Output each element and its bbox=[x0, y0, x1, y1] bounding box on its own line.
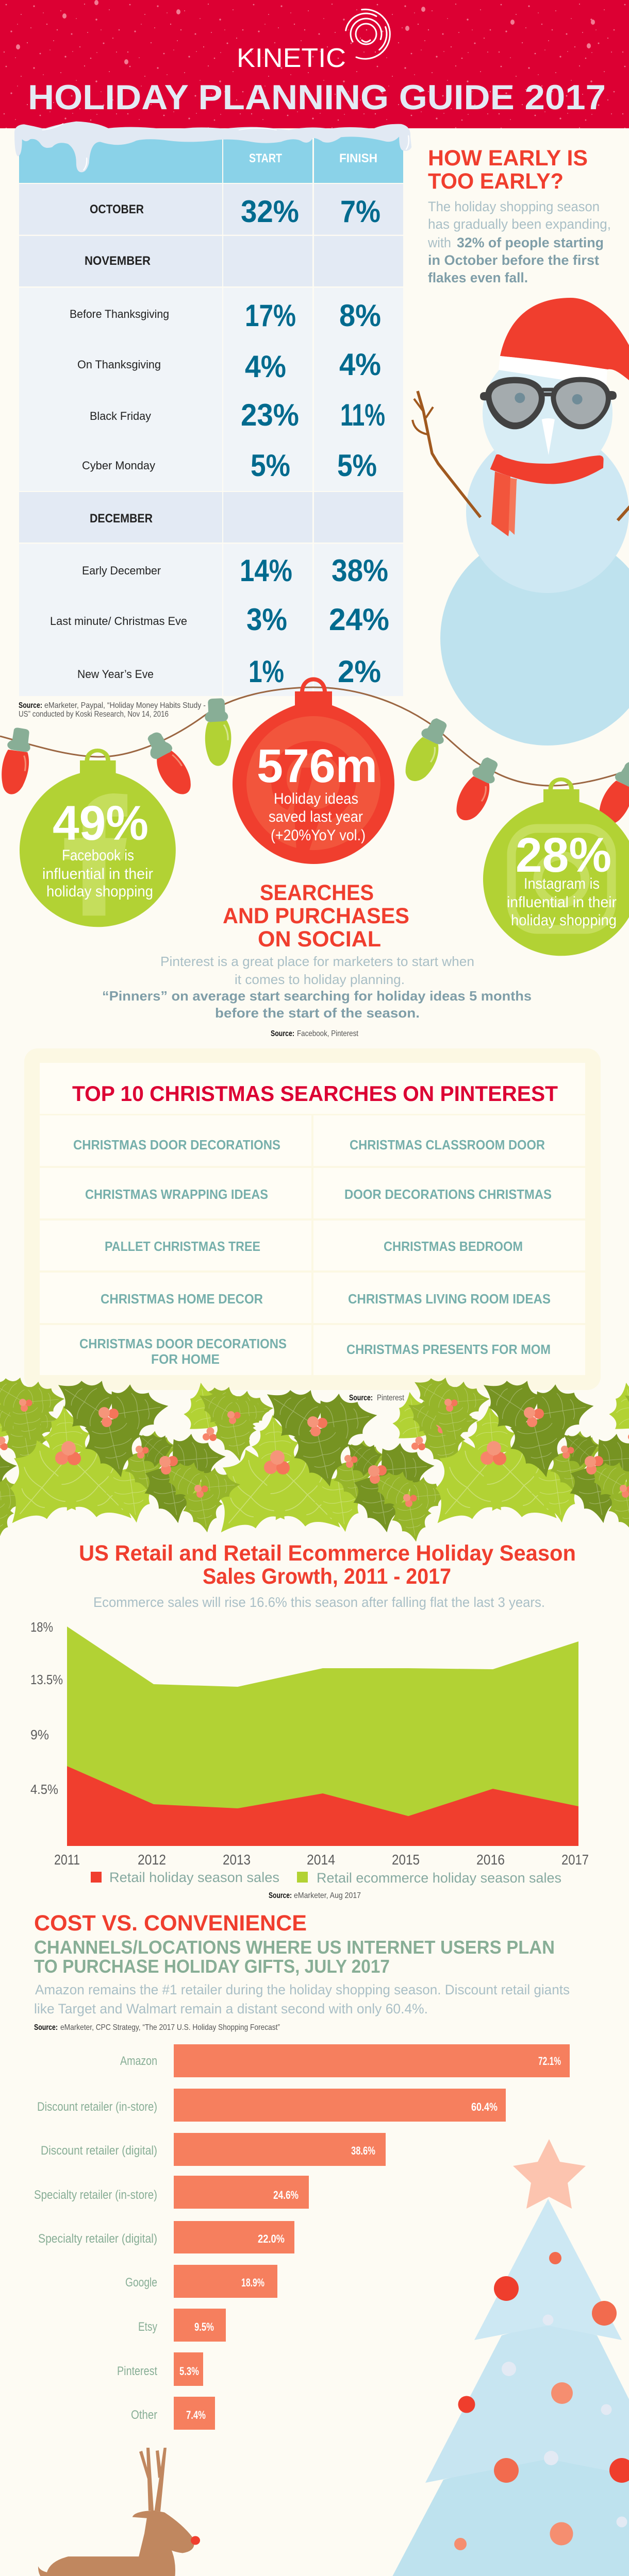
illustration: Christmas tree bbox=[374, 2139, 629, 2576]
bar chart: channels bbox=[34, 2044, 570, 2430]
text: Pinterest paragraph: “Pinners” on average start searching for holiday ideas 5 months bbox=[102, 988, 532, 1004]
x axis labels: 2017 bbox=[561, 1852, 589, 1868]
bar: Google bbox=[125, 2265, 277, 2298]
bar: Amazon bbox=[120, 2044, 570, 2077]
legend: Retail holiday season sales bbox=[109, 1870, 279, 1885]
red bulb 5 bbox=[456, 757, 498, 820]
text: Pinterest paragraph: Pinterest is a great place for marketers to start when bbox=[160, 954, 474, 969]
ornament: Instagram 28% bbox=[483, 779, 629, 956]
source: Pinterest: Pinterest bbox=[377, 1394, 404, 1402]
table row labels: Last minute/ Christmas Eve bbox=[50, 615, 187, 628]
bar: Specialty retailer digital: 22.0% bbox=[258, 2232, 285, 2245]
illustration: snowman bbox=[412, 298, 629, 745]
logo wordmark: KINETIC bbox=[237, 43, 346, 73]
bar: Discount retailer in-store bbox=[37, 2089, 506, 2122]
table row labels: NOVEMBER bbox=[85, 254, 151, 268]
bar: Other bbox=[131, 2397, 215, 2430]
tree tier 2 bbox=[425, 2322, 629, 2483]
y axis labels: 18% bbox=[30, 1619, 53, 1635]
text: early shopping paragraph: The holiday shopping season bbox=[428, 199, 600, 214]
table percentages: 3% bbox=[246, 602, 287, 637]
x axis labels: 2012 bbox=[138, 1852, 166, 1868]
table row labels: On Thanksgiving bbox=[77, 358, 161, 371]
source: channels: eMarketer, CPC Strategy, “The 2017 U.S. Holiday Shopping Forecast” bbox=[60, 2023, 280, 2032]
text: early shopping paragraph: flakes even fall. bbox=[428, 270, 528, 285]
text: early shopping paragraph: with bbox=[427, 235, 451, 250]
heading: how early is too early: TOO EARLY? bbox=[428, 169, 564, 194]
green bulb 4 bbox=[406, 718, 446, 781]
text: Pinterest paragraph: before the start of the season. bbox=[215, 1005, 420, 1021]
baubles bbox=[394, 2252, 629, 2576]
x axis labels: 2015 bbox=[392, 1852, 420, 1868]
snowman hat bbox=[500, 298, 629, 380]
bar: Specialty retailer digital bbox=[38, 2221, 294, 2253]
table row labels: New Year’s Eve bbox=[77, 668, 154, 681]
text: Amazon paragraph: like Target and Walmart remain a distant second with only 60.4%. bbox=[34, 2001, 428, 2016]
source: Pinterest: Source: bbox=[349, 1394, 373, 1402]
red bulb 1 bbox=[2, 727, 30, 794]
text: early shopping paragraph: 32% of people starting bbox=[457, 235, 604, 250]
heading: how early is too early: HOW EARLY IS bbox=[428, 146, 588, 171]
table row labels: OCTOBER bbox=[90, 202, 144, 216]
heading: sales growth bbox=[79, 1541, 576, 1589]
bar: Specialty retailer in-store: 24.6% bbox=[273, 2189, 299, 2201]
heading: searches and purchases on social: SEARCHES bbox=[260, 880, 374, 905]
panel: shopping timing table bbox=[19, 135, 403, 696]
table percentages: 23% bbox=[241, 398, 299, 432]
table header labels: FINISH bbox=[339, 151, 377, 165]
table row labels: Cyber Monday bbox=[82, 459, 155, 472]
string of lights wire bbox=[0, 687, 629, 786]
ornament: Pinterest 576m bbox=[233, 679, 394, 864]
illustration: reindeer bbox=[35, 2448, 200, 2576]
table percentages bbox=[240, 194, 389, 689]
red bulb 2 bbox=[148, 733, 191, 794]
y axis labels: 9% bbox=[30, 1727, 49, 1742]
source: social: Facebook, Pinterest bbox=[297, 1029, 358, 1038]
icon: Instagram bbox=[511, 828, 611, 929]
tree tier 1 bbox=[474, 2199, 622, 2340]
panel heading: TOP 10 CHRISTMAS SEARCHES ON PINTEREST bbox=[72, 1081, 558, 1106]
heading: sales growth: Sales Growth, 2011 - 2017 bbox=[203, 1564, 451, 1589]
snowman arms bbox=[412, 391, 629, 520]
table header labels: START bbox=[249, 151, 282, 165]
table row labels: DECEMBER bbox=[90, 512, 153, 526]
snowman sunglasses bbox=[480, 377, 617, 455]
table percentages: 5% bbox=[337, 448, 377, 483]
table percentages: 32% bbox=[241, 194, 299, 229]
table percentages: 38% bbox=[332, 553, 388, 588]
caption: Holiday ideas bbox=[274, 790, 358, 807]
table row labels: Early December bbox=[82, 564, 161, 577]
table row labels: Black Friday bbox=[90, 410, 151, 422]
search terms list: CHRISTMAS PRESENTS FOR MOM bbox=[346, 1342, 551, 1357]
bar: Discount retailer digital bbox=[41, 2133, 386, 2166]
caption: influential in their bbox=[507, 894, 617, 911]
title: HOLIDAY PLANNING GUIDE 2017 bbox=[28, 78, 606, 117]
x axis labels bbox=[54, 1852, 589, 1868]
section: header, table, social bbox=[0, 0, 629, 1038]
illustration: holly garland bbox=[0, 1362, 629, 1558]
bar: Etsy: Etsy bbox=[138, 2320, 157, 2334]
section: channels chart, scene, electronics, footer bbox=[34, 2044, 629, 2576]
icicle snow cap bbox=[14, 122, 411, 172]
source: table: Source: bbox=[19, 701, 42, 710]
y axis labels: 13.5% bbox=[30, 1672, 63, 1687]
caption: Facebook is bbox=[62, 847, 134, 864]
table row labels: Before Thanksgiving bbox=[70, 308, 169, 320]
caption: Instagram is bbox=[524, 875, 600, 892]
icon: Pinterest P bbox=[271, 741, 356, 850]
bar: Specialty retailer in-store: Specialty retailer (in-store) bbox=[34, 2188, 157, 2202]
table percentages: 5% bbox=[251, 448, 290, 483]
text: Amazon paragraph: Amazon remains the #1 retailer during the holiday shopping season. Discount retail giants bbox=[35, 1982, 570, 1997]
source: table: eMarketer, Paypal, “Holiday Money Habits Study - bbox=[44, 701, 206, 710]
source: channels: Source: bbox=[34, 2023, 58, 2032]
table percentages: 4% bbox=[245, 349, 286, 384]
source: social: Source: bbox=[271, 1029, 294, 1038]
bar: Amazon: Amazon bbox=[120, 2054, 157, 2068]
caption bbox=[42, 847, 153, 900]
bar: Specialty retailer in-store bbox=[34, 2176, 309, 2209]
green bulb 3 bbox=[205, 698, 231, 766]
caption: saved last year bbox=[269, 808, 363, 825]
reindeer nose bbox=[191, 2536, 200, 2545]
heading: sales growth: US Retail and Retail Ecommerce Holiday Season bbox=[79, 1541, 576, 1566]
heading: cost vs convenience: COST VS. CONVENIENCE bbox=[34, 1911, 307, 1936]
table percentages: 2% bbox=[338, 654, 381, 689]
bar: Pinterest: Pinterest bbox=[117, 2364, 157, 2378]
search terms list: FOR HOME bbox=[151, 1351, 220, 1367]
table percentages: 8% bbox=[339, 298, 381, 333]
heading: searches and purchases on social: AND PURCHASES bbox=[223, 904, 409, 928]
legend bbox=[91, 1870, 561, 1886]
star bbox=[513, 2139, 586, 2209]
subheading: channels: CHANNELS/LOCATIONS WHERE US INTERNET USERS PLAN bbox=[34, 1937, 555, 1958]
y axis labels bbox=[30, 1619, 63, 1797]
string lights left bbox=[2, 698, 231, 794]
bar: Other: Other bbox=[131, 2408, 157, 2422]
bar: Discount retailer in-store: Discount retailer (in-store) bbox=[37, 2100, 157, 2114]
caption bbox=[507, 875, 617, 929]
text: early shopping paragraph: in October before the first bbox=[428, 252, 599, 268]
table percentages: 24% bbox=[329, 602, 389, 637]
table percentages: 1% bbox=[249, 654, 284, 689]
search terms list: CHRISTMAS LIVING ROOM IDEAS bbox=[348, 1291, 551, 1307]
bar: Pinterest bbox=[117, 2352, 203, 2386]
text: early shopping paragraph bbox=[427, 199, 611, 285]
search terms list: DOOR DECORATIONS CHRISTMAS bbox=[344, 1187, 552, 1202]
text: Pinterest paragraph bbox=[102, 954, 532, 1021]
search terms list: CHRISTMAS DOOR DECORATIONS bbox=[73, 1137, 280, 1153]
text: early shopping paragraph: has gradually been expanding, bbox=[428, 216, 611, 232]
stat: 49% bbox=[53, 796, 148, 851]
snowman scarf bbox=[490, 454, 604, 536]
bar: Google: Google bbox=[125, 2276, 157, 2290]
bar: Discount retailer in-store: 60.4% bbox=[471, 2100, 498, 2113]
table percentages: 7% bbox=[340, 194, 380, 229]
search terms list: CHRISTMAS HOME DECOR bbox=[101, 1291, 263, 1307]
stat: 28% bbox=[516, 828, 611, 883]
table percentages: 17% bbox=[245, 298, 296, 333]
x axis labels: 2014 bbox=[307, 1852, 335, 1868]
bar: Discount retailer digital: Discount retailer (digital) bbox=[41, 2144, 157, 2158]
table percentages: 14% bbox=[240, 553, 292, 588]
search terms list: CHRISTMAS WRAPPING IDEAS bbox=[85, 1187, 268, 1202]
bar: Specialty retailer digital: Specialty retailer (digital) bbox=[38, 2232, 157, 2246]
x axis labels: 2013 bbox=[223, 1852, 251, 1868]
icon: Facebook f bbox=[64, 793, 127, 916]
source: chart: Source: bbox=[269, 1891, 292, 1900]
header band bbox=[0, 0, 629, 128]
bar: Etsy bbox=[138, 2309, 226, 2342]
table row labels bbox=[50, 202, 187, 681]
search terms list bbox=[73, 1137, 552, 1367]
bar: Etsy: 9.5% bbox=[194, 2320, 214, 2333]
retail area bbox=[67, 1766, 578, 1846]
ornament: Facebook 49% bbox=[20, 751, 176, 927]
area chart bbox=[30, 1619, 589, 1886]
legend: Retail ecommerce holiday season sales bbox=[317, 1870, 561, 1886]
search terms list: PALLET CHRISTMAS TREE bbox=[105, 1239, 260, 1254]
subheading: channels bbox=[34, 1937, 555, 1977]
source: chart: eMarketer, Aug 2017 bbox=[294, 1891, 361, 1900]
source: chart bbox=[269, 1891, 361, 1900]
text: sales growth subtitle: Ecommerce sales will rise 16.6% this season after falling flat the last 3 years. bbox=[93, 1595, 545, 1610]
table header labels bbox=[249, 151, 377, 165]
bar: Amazon: 72.1% bbox=[538, 2055, 561, 2067]
panel: top 10 Christmas searches bbox=[24, 1048, 601, 1390]
caption: holiday shopping bbox=[511, 912, 617, 929]
bar: Pinterest: 5.3% bbox=[179, 2365, 199, 2378]
search terms list: CHRISTMAS CLASSROOM DOOR bbox=[350, 1137, 545, 1153]
bar: Google: 18.9% bbox=[241, 2276, 264, 2289]
red bulb 6 bbox=[599, 762, 629, 825]
tree tier 3 bbox=[374, 2452, 629, 2576]
text: Pinterest paragraph: it comes to holiday planning. bbox=[235, 972, 405, 987]
source: social bbox=[271, 1029, 358, 1038]
section: searches, holly, sales growth bbox=[0, 1048, 629, 2032]
text: Amazon paragraph bbox=[34, 1982, 570, 2016]
source: Pinterest bbox=[349, 1394, 404, 1402]
subheading: channels: TO PURCHASE HOLIDAY GIFTS, JULY 2017 bbox=[34, 1956, 390, 1977]
search terms list: CHRISTMAS DOOR DECORATIONS bbox=[79, 1336, 287, 1351]
x axis labels: 2016 bbox=[476, 1852, 505, 1868]
bar: Discount retailer digital: 38.6% bbox=[351, 2144, 375, 2157]
caption: holiday shopping bbox=[46, 883, 153, 900]
logo swirl icon bbox=[346, 9, 390, 59]
heading: how early is too early bbox=[428, 146, 588, 194]
caption: (+20%YoY vol.) bbox=[271, 827, 366, 844]
caption: influential in their bbox=[42, 866, 153, 883]
table percentages: 11% bbox=[340, 398, 385, 432]
heading: searches and purchases on social bbox=[223, 880, 409, 952]
search terms list: CHRISTMAS BEDROOM bbox=[384, 1239, 523, 1254]
source: table bbox=[19, 701, 206, 719]
caption bbox=[269, 790, 366, 844]
table percentages: 4% bbox=[339, 347, 381, 382]
x axis labels: 2011 bbox=[54, 1852, 80, 1868]
bar: Other: 7.4% bbox=[186, 2409, 206, 2421]
stat: 576m bbox=[257, 740, 377, 792]
ecommerce area bbox=[67, 1626, 578, 1846]
heading: searches and purchases on social: ON SOCIAL bbox=[258, 927, 381, 952]
source: table: US” conducted by Koski Research, Nov 14, 2016 bbox=[19, 710, 169, 719]
y axis labels: 4.5% bbox=[30, 1782, 58, 1797]
string lights right bbox=[406, 718, 629, 825]
